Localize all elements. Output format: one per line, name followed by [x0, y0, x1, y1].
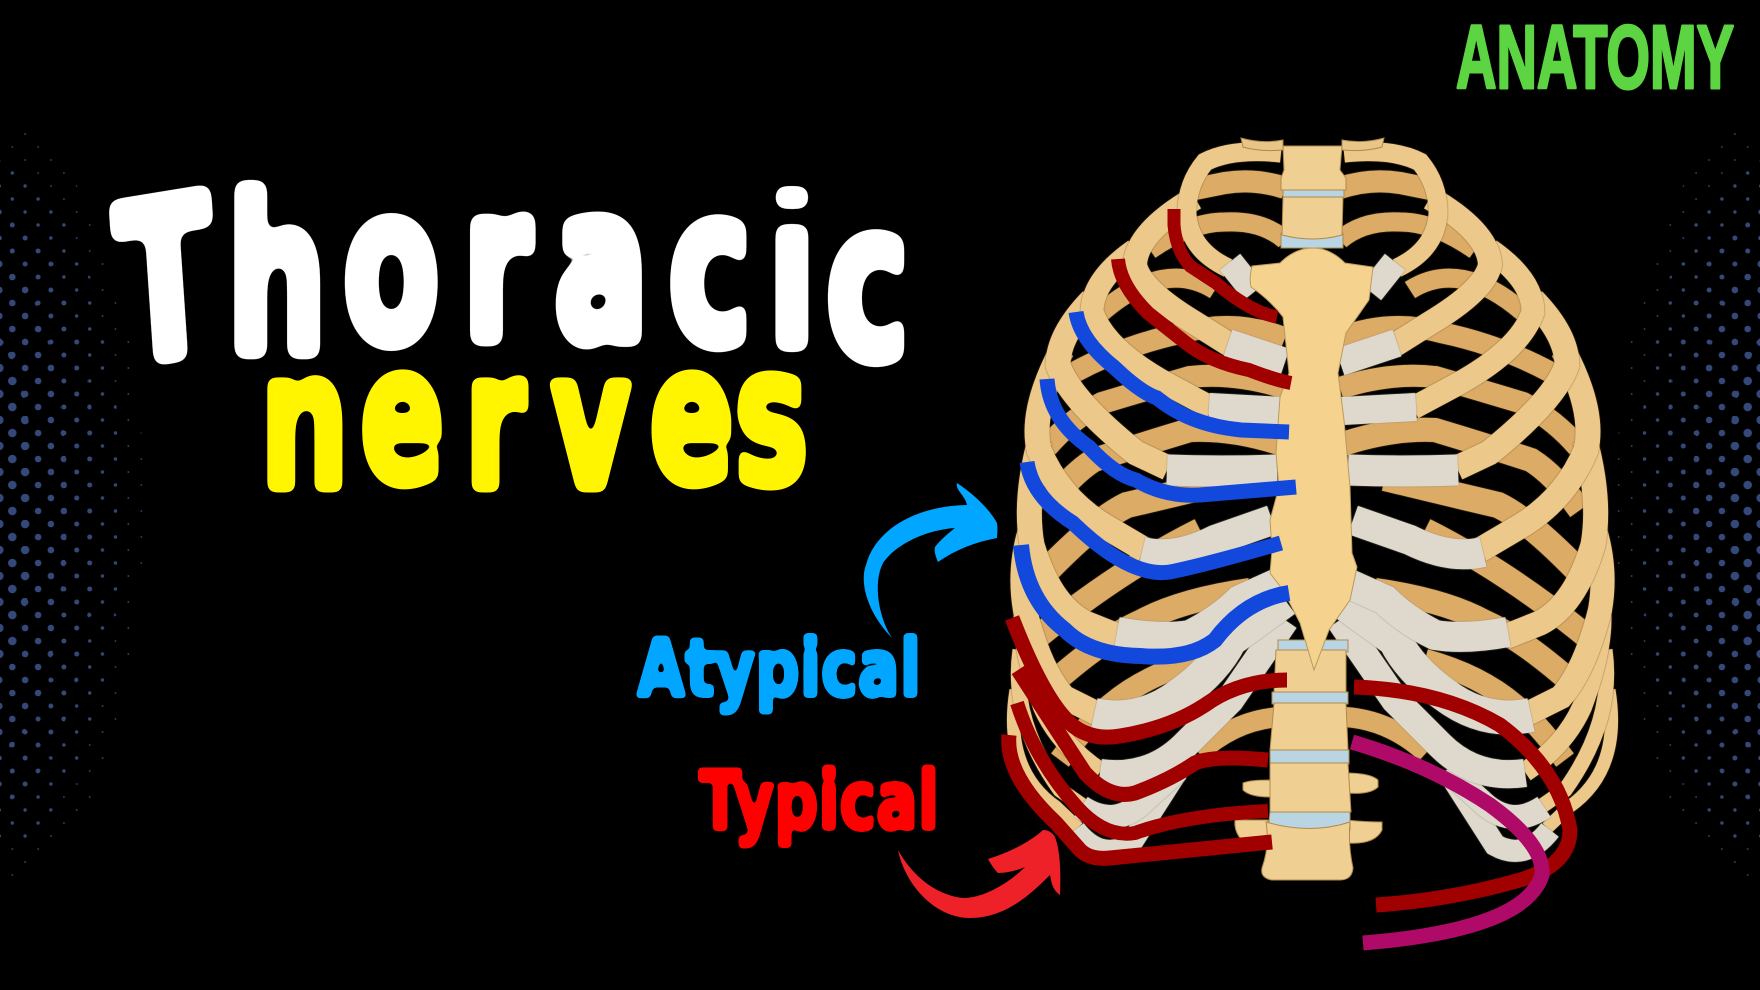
subcostal nerve: right magenta	[1352, 742, 1542, 943]
label: Atypical: Atypical	[637, 622, 921, 715]
atypical nerve: T1	[1174, 209, 1277, 317]
typical nerve: T5	[1027, 462, 1281, 573]
halftone dots: right	[1616, 120, 1760, 890]
halftone dots: left	[0, 120, 144, 890]
spine	[1235, 146, 1382, 880]
label: Typical: Typical	[699, 754, 939, 849]
subcostal nerve: right dark red	[1354, 687, 1570, 905]
left half of rib cage	[1013, 138, 1285, 851]
typical nerve: T3	[1076, 312, 1289, 432]
arrow: red to typical nerves	[898, 830, 1060, 918]
atypical nerve: T2	[1118, 259, 1291, 383]
atypical nerve: T8	[1018, 670, 1268, 794]
sternum	[1250, 248, 1373, 670]
costal cartilage	[1075, 262, 1285, 851]
atypical nerve: T10	[1009, 735, 1272, 858]
rib cage illustration	[1013, 138, 1612, 880]
back ribs	[1038, 181, 1285, 760]
arrow: blue to atypical nerves	[864, 483, 997, 638]
right half of rib cage	[1340, 138, 1612, 851]
clavicular rib head	[1241, 138, 1283, 151]
nerves overlay	[1009, 209, 1570, 943]
atypical nerve: T7	[1012, 618, 1287, 737]
typical nerve: T6	[1021, 545, 1289, 657]
title: nerves: nerves	[260, 302, 809, 534]
title: Thoracic: Thoracic	[109, 138, 909, 417]
atypical nerve: T9	[1017, 703, 1268, 834]
typical nerve: T4	[1047, 379, 1296, 495]
front ribs	[1013, 152, 1281, 828]
